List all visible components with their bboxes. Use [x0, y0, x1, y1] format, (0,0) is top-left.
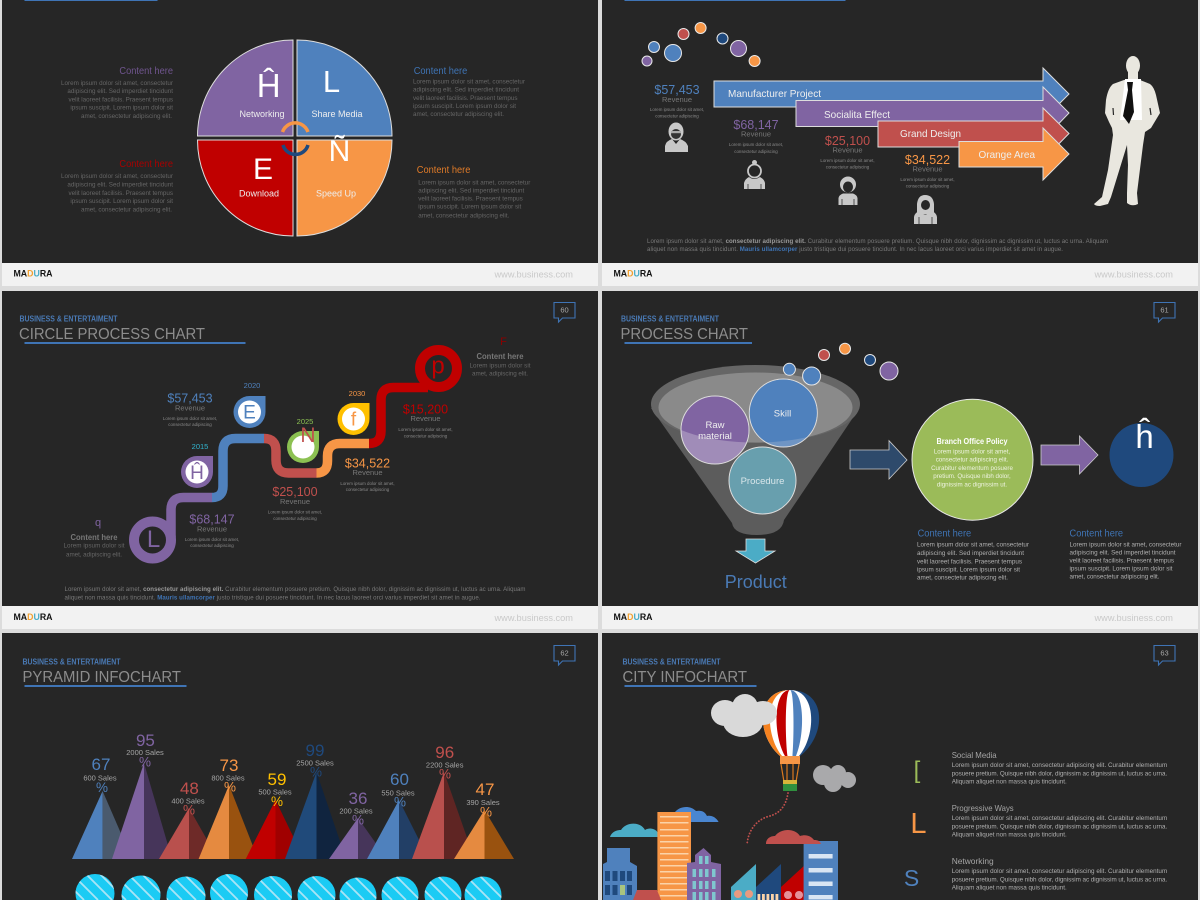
circle: procedure — [729, 447, 796, 514]
cloud: red — [766, 830, 821, 844]
header underline — [624, 0, 846, 1]
pyramid 99: % — [310, 764, 322, 780]
pyramid 59: 500 Sales — [258, 788, 292, 796]
text block: note — [64, 586, 526, 602]
quadrant: download — [198, 140, 293, 236]
heading: CIRCLE PROCESS CHART — [19, 326, 205, 343]
revenue: 68,147: $68,147 — [189, 512, 235, 526]
revenue: 57,453: Revenue — [175, 404, 205, 412]
text block: end: Content here — [476, 351, 524, 361]
circle: raw material — [681, 396, 749, 464]
revenue: 15,200: consectetur adipiscing — [404, 434, 448, 438]
heading — [22, 658, 186, 687]
text block: end: Lorem ipsum dolor sit — [470, 362, 531, 370]
pyramid 73: % — [224, 780, 236, 794]
decorative bubbles — [783, 343, 898, 385]
revenue: 25,100: Revenue — [832, 146, 863, 154]
item: social media: posuere pretium. Quisque nibh dolor, dignissim ac dignissim ut, luctus ac urna. — [952, 770, 1167, 778]
text block: second — [1070, 528, 1182, 580]
text block: purple content: Lorem ipsum dolor sit amet, consectetur — [61, 80, 173, 87]
footer: MADURA — [14, 268, 53, 278]
text block: purple content: amet, consectetur adipiscing elit. — [81, 113, 172, 120]
pyramid 67: 67 — [92, 755, 110, 774]
arrow: manufacturer project — [714, 68, 1069, 120]
marker: 2025: N — [300, 424, 316, 447]
panel: arrows revenue slide — [602, 0, 1198, 286]
text block: orange content: velit laoreet facilisis. Praesent tempus — [418, 196, 523, 202]
heading — [620, 314, 752, 344]
footer: www.business.com — [494, 613, 573, 624]
circle: branch office policy: Curabitur elementum posuere — [931, 465, 1013, 472]
text block: second: ipsum suscipit. Lorem ipsum dolor sit — [1070, 566, 1173, 572]
panel: circle process chart — [2, 291, 598, 629]
page badge 60: 60 — [560, 306, 569, 314]
revenue: 34,522: Revenue — [912, 164, 943, 174]
pyramid 48: % — [183, 802, 195, 818]
pyramid 73: 73 — [220, 756, 238, 775]
revenue: 15,200 — [398, 402, 453, 438]
building: factory red — [781, 864, 806, 900]
marker: 2015: Ĥ — [190, 462, 204, 484]
circle: raw material: Raw — [705, 420, 725, 431]
marker: 2020: E — [243, 402, 256, 424]
building: red roof — [633, 890, 661, 900]
arrow: dark blue — [850, 441, 907, 479]
marker: 2030 — [338, 389, 370, 435]
quadrant: speed up — [297, 134, 392, 236]
marker: 2020: 2020 — [244, 381, 260, 390]
revenue: 57,453: Lorem ipsum dolor sit amet, — [163, 416, 217, 421]
text block: blue content: ipsum suscipit. Lorem ipsum dolor sit — [413, 103, 516, 110]
text block: start: Content here — [70, 532, 118, 542]
silhouette: businessman — [1094, 56, 1160, 206]
pyramid 67 — [72, 755, 132, 859]
pyramid 96: 96 — [435, 743, 454, 762]
pyramid 36: 200 Sales — [339, 806, 373, 816]
pyramid 99: 99 — [306, 741, 324, 760]
text block: note: aliquet non massa quis tincidunt. Mauris ullamcorper justo tristique dui posuere tincidunt. In nec lacus laoreet orci varius imperdiet sit amet in augue. — [64, 594, 481, 602]
text block: note: aliquet non massa quis tincidunt. Mauris ullamcorper justo tristique dui posuere tincidunt. In nec lacus laoreet orci varius imperdiet sit amet in augue. — [647, 246, 1063, 253]
pyramid 47: 390 Sales — [466, 798, 500, 807]
marker: 2025 — [287, 417, 319, 463]
building: factory navy — [756, 864, 781, 900]
footer — [2, 606, 598, 629]
building: purple — [687, 848, 721, 900]
item: progressive ways: Lorem ipsum dolor sit amet, consectetur adipiscing elit. Curabitur elementum — [952, 815, 1167, 822]
icon: person 2 — [744, 160, 765, 189]
circle: branch office policy: consectetur adipiscing elit. — [936, 456, 1009, 464]
circle: branch office policy: Lorem ipsum dolor sit amet, — [934, 448, 1010, 456]
item: progressive ways: Aliquam aliquet non massa quis tincidunt. — [952, 832, 1067, 838]
circle: dark blue: ĥ — [1135, 417, 1154, 455]
pyramid 36 — [329, 789, 387, 859]
quadrant: share media: L — [323, 64, 340, 99]
revenue: 34,522 — [340, 456, 395, 492]
circle: skill: Skill — [774, 408, 791, 420]
text block: second: Content here — [1070, 528, 1123, 540]
pyramid 99 — [285, 741, 346, 859]
marker: 2015: 2015 — [192, 442, 208, 451]
revenue: 57,453: Lorem ipsum dolor sit amet, — [650, 107, 704, 112]
text block: first: ipsum suscipit. Lorem ipsum dolor sit — [917, 566, 1020, 574]
text block: first: Content here — [918, 528, 972, 540]
arrow: purple — [1041, 436, 1098, 474]
panel: pyramid infochart — [2, 633, 598, 900]
heading — [19, 314, 246, 344]
item: social media — [914, 750, 1167, 786]
revenue: 34,522: Lorem ipsum dolor sit amet, — [340, 481, 395, 486]
page badge 60 — [554, 302, 575, 322]
text block: purple content — [61, 66, 173, 120]
pyramid 67: 600 Sales — [83, 774, 117, 782]
text block: orange content — [417, 165, 530, 220]
quadrant: speed up: Speed Up — [316, 188, 356, 198]
pyramid 47 — [454, 780, 514, 859]
text block: orange content: Content here — [417, 165, 471, 176]
revenue: 25,100 — [268, 485, 322, 521]
text block: blue content — [413, 66, 525, 118]
arrow: orange area — [959, 128, 1069, 180]
building: orange tower — [657, 812, 691, 900]
quadrant: networking: Networking — [239, 109, 285, 119]
text block: first: Lorem ipsum dolor sit amet, consectetur — [917, 542, 1029, 548]
pyramid 48 — [159, 779, 218, 859]
text block: orange content: adipiscing elit. Sed imperdiet tincidunt — [418, 188, 525, 194]
text block: note: Lorem ipsum dolor sit amet, consectetur adipiscing elit. Curabitur elementum posuere pretium. Quisque nibh dolor, dignissim ac dignissim ut, luctus ac urna. Aliquam — [64, 586, 526, 593]
heading: BUSINESS & ENTERTAIMENT — [20, 314, 118, 324]
pyramid 60: % — [394, 794, 406, 810]
revenue: 34,522: consectetur adipiscing — [906, 184, 950, 188]
pyramid 95: 95 — [136, 731, 155, 750]
pyramid 48: 400 Sales — [171, 796, 205, 806]
revenue: 34,522: $34,522 — [345, 456, 390, 470]
text block: start: q — [95, 517, 101, 529]
text block: end: amet, adipiscing elit. — [472, 370, 528, 378]
heading — [622, 658, 756, 687]
item: progressive ways: Progressive Ways — [952, 803, 1014, 813]
revenue: 15,200: $15,200 — [403, 402, 448, 416]
footer: MADURA — [614, 612, 653, 622]
revenue: 25,100: Revenue — [280, 497, 310, 506]
revenue: 34,522: $34,522 — [905, 153, 950, 167]
circle: branch office policy: pretium. Quisque nibh dolor, — [933, 473, 1011, 480]
text block: second: Lorem ipsum dolor sit amet, consectetur — [1070, 542, 1182, 548]
text block: second: amet, consectetur adipiscing elit. — [1070, 574, 1160, 580]
cloud: small grey — [813, 765, 856, 792]
page badge 62: 62 — [560, 648, 569, 658]
heading: BUSINESS & ENTERTAIMENT — [622, 658, 721, 666]
page badge 63 — [1154, 646, 1175, 665]
pyramid 36: 36 — [349, 789, 367, 808]
circle: procedure: Procedure — [741, 476, 784, 487]
item: networking: S — [904, 865, 919, 891]
text block: purple content: adipiscing elit. Sed imperdiet tincidunt — [67, 88, 173, 95]
revenue: 68,147 — [185, 512, 239, 548]
item: social media: Lorem ipsum dolor sit amet, consectetur adipiscing elit. Curabitur elementum — [952, 762, 1167, 769]
cloud: blue — [675, 807, 719, 822]
cloud: teal — [610, 824, 664, 837]
item: progressive ways: posuere pretium. Quisque nibh dolor, dignissim ac dignissim ut, luctus ac urna. — [952, 824, 1167, 830]
text block: red content: velit laoreet facilisis. Praesent tempus — [68, 190, 173, 197]
marker: 2030: 2030 — [349, 389, 365, 398]
text block: red content — [61, 159, 173, 214]
revenue: 68,147: Revenue — [197, 524, 227, 534]
revenue: 34,522: consectetur adipiscing — [346, 487, 390, 492]
pyramid 96: 2200 Sales — [426, 760, 464, 770]
revenue: 68,147: consectetur adipiscing — [734, 149, 778, 154]
heading: PYRAMID INFOCHART — [22, 669, 181, 686]
marker: 2025: 2025 — [297, 417, 313, 426]
text block: start: amet, adipiscing elit. — [66, 552, 122, 558]
revenue: 68,147 — [729, 118, 783, 154]
text block: first: adipiscing elit. Sed imperdiet tincidunt — [917, 550, 1024, 557]
page badge 61 — [1154, 302, 1175, 322]
heading: PROCESS CHART — [620, 326, 748, 343]
revenue: 34,522: Revenue — [352, 468, 383, 477]
revenue: 34,522 — [900, 153, 955, 188]
revenue: 68,147: Revenue — [741, 130, 771, 138]
arrow: manufacturer project: Manufacturer Project — [728, 88, 821, 100]
text block: orange content: amet, consectetur adipiscing elit. — [418, 212, 510, 220]
flight path dots — [747, 793, 788, 845]
text block: second: velit laoreet facilisis. Praesent tempus — [1070, 558, 1174, 564]
header underline — [24, 0, 158, 1]
text block: blue content: amet, consectetur adipiscing elit. — [413, 111, 504, 118]
text block: purple content: velit laoreet facilisis. Praesent tempus — [68, 96, 173, 104]
pyramid 47: % — [480, 804, 492, 820]
quadrant: download: Download — [239, 188, 279, 198]
heading: BUSINESS & ENTERTAIMENT — [22, 658, 121, 666]
arrow: down to product — [736, 539, 775, 563]
pyramid 95: 2000 Sales — [126, 748, 164, 757]
marker: L: L — [147, 526, 160, 553]
icon: person 1 — [665, 122, 688, 152]
revenue: 68,147: $68,147 — [733, 118, 779, 132]
pyramid 67: % — [96, 780, 108, 795]
building: factory teal — [731, 864, 756, 900]
quadrant: share media: Share Media — [311, 109, 363, 119]
text block: end: F — [500, 336, 507, 348]
pyramid 59: % — [271, 794, 283, 809]
item: social media: Aliquam aliquet non massa quis tincidunt. — [952, 778, 1067, 786]
text block: purple content: Content here — [119, 66, 173, 77]
revenue: 25,100: consectetur adipiscing — [273, 516, 317, 521]
funnel — [651, 365, 860, 535]
item: progressive ways: L — [910, 808, 927, 840]
pyramid 60: 550 Sales — [381, 788, 415, 798]
item: networking: Lorem ipsum dolor sit amet, consectetur adipiscing elit. Curabitur elementum — [952, 868, 1167, 875]
revenue: 25,100: $25,100 — [272, 485, 318, 499]
circle: dark blue — [1110, 417, 1174, 487]
footer — [602, 263, 1198, 286]
decorative bubbles — [642, 22, 760, 66]
text block: red content: amet, consectetur adipiscing elit. — [81, 206, 172, 214]
pyramid 96: % — [439, 766, 451, 782]
panel: quadrant circle slide — [2, 0, 598, 286]
text block: first — [917, 528, 1029, 582]
pyramid 47: 47 — [476, 780, 494, 799]
item: networking: Networking — [952, 856, 994, 866]
pyramid 99: 2500 Sales — [296, 758, 334, 768]
text block: red content: adipiscing elit. Sed imperdiet tincidunt — [67, 182, 173, 188]
item: social media: Social Media — [952, 750, 997, 760]
pyramid 59 — [246, 770, 304, 859]
quadrant: networking — [198, 40, 293, 136]
pyramid 59: 59 — [268, 770, 286, 789]
pyramid 60 — [367, 770, 429, 859]
text block: purple content: ipsum suscipit. Lorem ipsum dolor sit — [70, 104, 173, 112]
striped circles row — [76, 874, 502, 900]
circle: raw material: material — [698, 431, 732, 442]
footer: MADURA — [614, 268, 653, 278]
hot air balloon — [763, 690, 819, 791]
revenue: 15,200: Lorem ipsum dolor sit amet, — [398, 427, 453, 432]
pyramid 73: 800 Sales — [211, 774, 245, 782]
revenue: 25,100: consectetur adipiscing — [826, 164, 870, 170]
text block: note: Lorem ipsum dolor sit amet, consectetur adipiscing elit. Curabitur elementum posuere pretium. Quisque nibh dolor, dignissim ac dignissim ut, luctus ac urna. Aliquam — [647, 238, 1108, 245]
text block: blue content: velit laoreet facilisis. Praesent tempus — [413, 95, 518, 102]
footer — [602, 606, 1198, 629]
quadrant: share media — [297, 40, 392, 136]
text block: start: Lorem ipsum dolor sit — [64, 542, 125, 550]
footer: www.business.com — [494, 270, 573, 280]
arrow: grand design — [878, 108, 1069, 160]
text block: blue content: Lorem ipsum dolor sit amet, consectetur — [413, 78, 525, 86]
text block: orange content: ipsum suscipit. Lorem ipsum dolor sit — [418, 204, 522, 210]
marker: 2015 — [181, 442, 213, 488]
revenue: 57,453: Revenue — [662, 95, 692, 104]
pyramid 48: 48 — [180, 779, 199, 798]
revenue: 25,100: Lorem ipsum dolor sit amet, — [268, 510, 322, 514]
circle: skill — [749, 379, 817, 447]
icon: cycle arrows — [282, 123, 308, 154]
text block: first: velit laoreet facilisis. Praesent tempus — [917, 558, 1022, 566]
pyramid chart — [72, 731, 514, 859]
label: product: Product — [725, 572, 787, 592]
quadrant: download: E — [253, 153, 273, 186]
icon: person 4 — [914, 195, 937, 224]
heading: BUSINESS & ENTERTAIMENT — [621, 314, 719, 324]
arrow: socialita effect — [796, 87, 1069, 140]
revenue: 34,522: Lorem ipsum dolor sit amet, — [900, 177, 955, 182]
text block: start — [64, 517, 125, 558]
text block: red content: Content here — [119, 159, 173, 170]
revenue: 25,100: Lorem ipsum dolor sit amet, — [820, 158, 875, 163]
text block: blue content: adipiscing elit. Sed imperdiet tincidunt — [413, 86, 519, 94]
revenue: 57,453: consectetur adipiscing — [655, 114, 699, 118]
pyramid 96 — [412, 743, 474, 859]
footer: www.business.com — [1094, 270, 1173, 280]
revenue: 68,147: Lorem ipsum dolor sit amet, — [185, 537, 239, 542]
icon: person 3 — [838, 176, 858, 205]
revenue: 68,147: consectetur adipiscing — [190, 543, 234, 548]
revenue: 57,453: consectetur adipiscing — [168, 422, 212, 427]
page badge 61: 61 — [1160, 306, 1169, 314]
footer: MADURA — [14, 612, 53, 622]
text block: orange content: Lorem ipsum dolor sit amet, consectetur — [418, 180, 530, 186]
panel: process chart — [602, 291, 1198, 629]
building: blue right — [804, 841, 838, 900]
text block: red content: ipsum suscipit. Lorem ipsum dolor sit — [70, 198, 173, 205]
revenue: 25,100: $25,100 — [825, 134, 870, 148]
revenue: 57,453 — [650, 83, 704, 118]
marker: 2020 — [234, 381, 266, 428]
revenue: 57,453: $57,453 — [167, 392, 213, 406]
arrow: orange area: Orange Area — [978, 149, 1035, 161]
footer: www.business.com — [1094, 613, 1173, 624]
item: networking: posuere pretium. Quisque nibh dolor, dignissim ac dignissim ut, luctus ac urna. — [952, 876, 1167, 884]
building: blue left — [603, 848, 637, 900]
cloud: large — [711, 694, 777, 737]
item: networking: Aliquam aliquet non massa quis tincidunt. — [952, 884, 1067, 892]
circle: branch office policy — [912, 399, 1033, 520]
text block: second: adipiscing elit. Sed imperdiet tincidunt — [1070, 550, 1176, 556]
footer — [2, 263, 598, 286]
pyramid 95 — [112, 731, 172, 859]
pyramid 73 — [199, 756, 258, 859]
text block: red content: Lorem ipsum dolor sit amet, consectetur — [61, 173, 173, 180]
circle: branch office policy: Branch Office Policy — [936, 437, 1008, 446]
text block: blue content: Content here — [414, 66, 468, 77]
text block: end — [470, 336, 531, 378]
text block: first: amet, consectetur adipiscing elit. — [917, 574, 1008, 582]
revenue: 57,453 — [163, 392, 217, 427]
item: networking — [904, 856, 1167, 892]
pyramid 95: % — [139, 754, 151, 770]
heading: CITY INFOCHART — [622, 669, 747, 686]
revenue: 57,453: $57,453 — [654, 83, 700, 97]
revenue: 25,100 — [820, 134, 875, 170]
quadrant: speed up: Ñ — [329, 134, 350, 168]
page badge 62 — [554, 646, 575, 665]
pyramid 36: % — [352, 812, 364, 828]
panel: city infochart — [602, 633, 1198, 900]
marker: p: p — [431, 352, 445, 380]
text block: note — [647, 238, 1108, 253]
page badge 63: 63 — [1160, 648, 1169, 658]
marker: 2030: f — [351, 410, 357, 430]
revenue: 15,200: Revenue — [410, 414, 441, 423]
arrow: socialita effect: Socialita Effect — [824, 109, 890, 121]
pyramid 60: 60 — [390, 770, 409, 789]
item: progressive ways — [910, 803, 1167, 840]
circle: branch office policy: dignissim ac dignissim ut. — [937, 482, 1007, 488]
item: social media: [ — [914, 757, 921, 784]
arrow: grand design: Grand Design — [900, 128, 961, 140]
quadrant: networking: Ĥ — [257, 67, 281, 104]
revenue: 68,147: Lorem ipsum dolor sit amet, — [729, 142, 783, 147]
process path — [134, 350, 457, 558]
